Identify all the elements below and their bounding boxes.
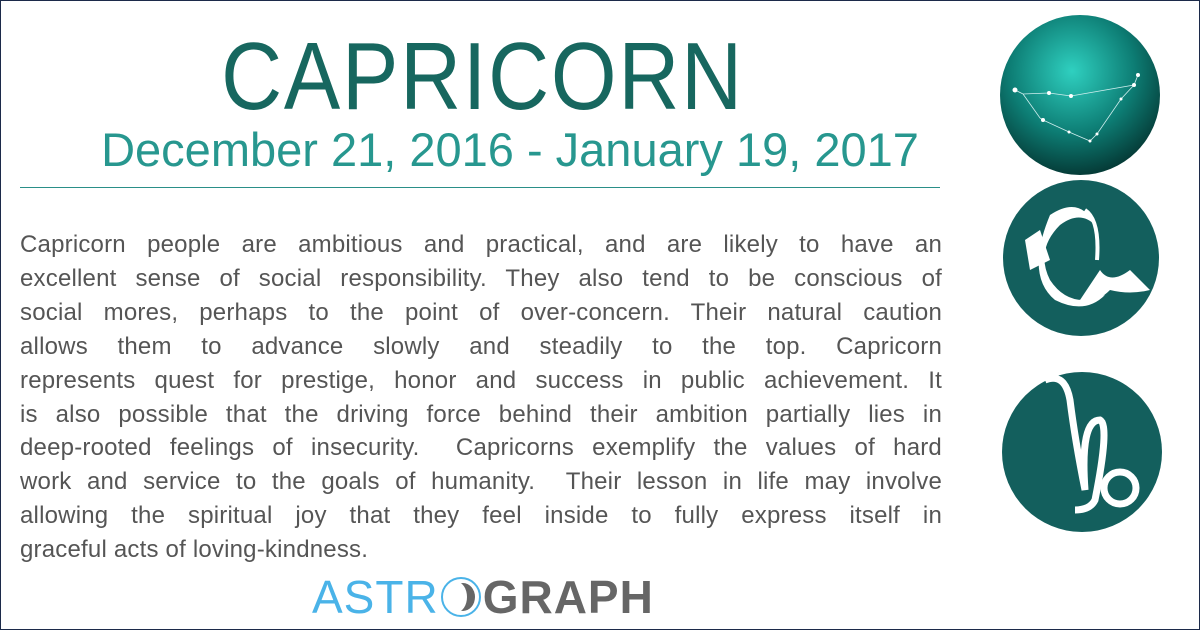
date range: December 21, 2016 - January 19, 2017 [101, 123, 919, 176]
description text: Capricorn people are ambitious and practical, and are likely to have an [20, 231, 942, 258]
description text: social mores, perhaps to the point of over-concern. Their natural caution [20, 299, 942, 326]
description text: work and service to the goals of humanity. Their lesson in life may involve [20, 468, 942, 495]
description text: is also possible that the driving force behind their ambition partially lies in [20, 401, 942, 428]
logo: astrograph: ASTR GRAPH [312, 571, 654, 623]
icon: sea-goat [1003, 180, 1159, 336]
description text: represents quest for prestige, honor and success in public achievement. It [20, 367, 942, 394]
icon: constellation [1000, 15, 1160, 175]
icons column [1000, 15, 1162, 532]
description text [20, 231, 942, 563]
description text: graceful acts of loving-kindness. [20, 536, 368, 563]
title: CAPRICORN [221, 23, 744, 130]
description text: allows them to advance slowly and steadily to the top. Capricorn [20, 333, 942, 360]
description text: allowing the spiritual joy that they feel inside to fully express itself in [20, 502, 942, 529]
description text: deep-rooted feelings of insecurity. Capricorns exemplify the values of hard [20, 434, 942, 461]
icon: capricorn glyph [1002, 372, 1162, 532]
description text: excellent sense of social responsibility. They also tend to be conscious of [20, 265, 942, 292]
